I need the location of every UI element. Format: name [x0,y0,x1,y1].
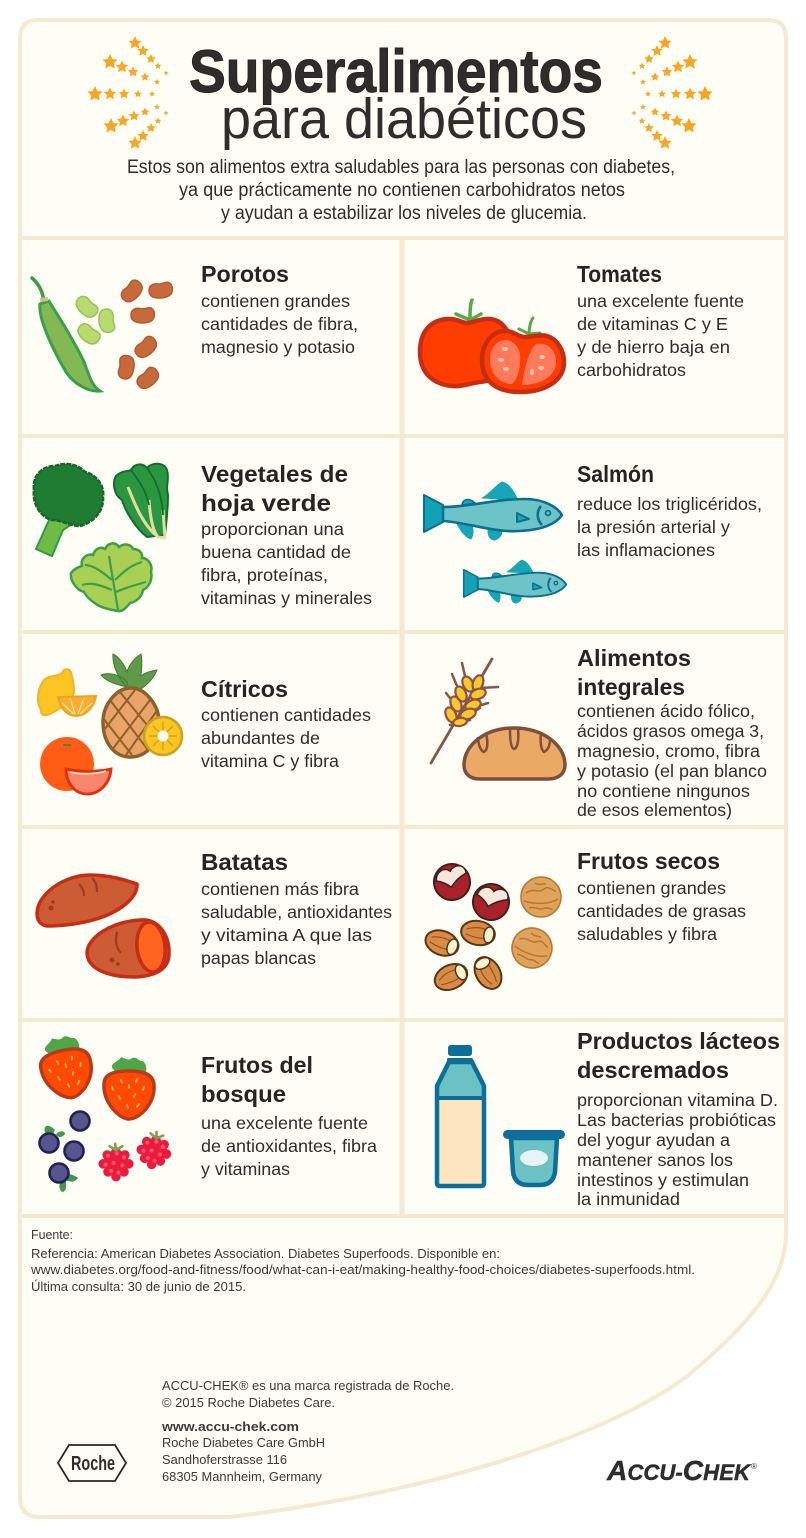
panel: Alimentos integrales [431,645,767,820]
description: la presión arterial y [577,517,730,537]
stars left [87,36,168,149]
description: de vitaminas C y E [577,314,728,334]
description: magnesio, cromo, fibra [577,741,760,761]
logo: Accu-Chek: ® [751,1462,757,1471]
panel: Productos lácteos descremados [437,1028,780,1209]
logo: Accu-Chek: ACCU-CHEK [606,1455,752,1486]
icon: nuts [422,860,561,995]
source references [30,1227,695,1294]
panel: Tomates [420,261,744,392]
description: ácidos grasos omega 3, [577,721,764,741]
legal and contact text: ACCU-CHEK® es una marca registrada de Roche. [162,1378,454,1393]
description [577,701,767,820]
icon: sweet potatoes [37,875,169,977]
heading [577,645,691,700]
description: una excelente fuente [577,291,744,311]
description: papas blancas [201,948,316,968]
title: Superalimentos [189,38,603,105]
heading [201,461,348,516]
panel: Batatas [37,849,392,977]
description: mantener sanos los [577,1150,733,1170]
description: magnesio y potasio [201,337,355,357]
heading: Frutos del [201,1052,313,1078]
description: Las bacterias probióticas [577,1110,776,1130]
description [577,878,746,944]
description: contienen cantidades [201,705,371,725]
description [577,291,744,380]
description [201,705,371,771]
icon: berries [35,1032,175,1192]
panel: Vegetales de hoja verde [34,461,372,611]
panel: Frutos secos [422,848,746,995]
logo: Roche [58,1445,126,1481]
description: fibra, proteínas, [201,565,328,585]
description: saludables y fibra [577,924,717,944]
heading: Vegetales de [201,461,348,487]
description: cantidades de grasas [577,901,746,921]
heading: Cítricos [201,676,288,702]
source references: Fuente: [31,1227,73,1242]
description: y de hierro baja en [577,337,730,357]
panel: Cítricos [38,654,371,794]
legal and contact text: © 2015 Roche Diabetes Care. [162,1395,335,1410]
description: contienen grandes [201,291,350,311]
intro text: ya que prácticamente no contienen carbohidratos netos [179,180,625,201]
heading: Tomates [577,261,662,287]
description: la inmunidad [577,1189,680,1209]
description: proporcionan vitamina D. [577,1090,778,1110]
heading: Alimentos [577,645,691,671]
description: cantidades de fibra, [201,314,358,334]
description [201,519,372,608]
icon: broccoli and greens [34,464,168,611]
description [201,291,358,357]
description: del yogur ayudan a [577,1130,730,1150]
description: buena cantidad de [201,542,351,562]
description: carbohidratos [577,360,686,380]
stars right [632,36,713,149]
description: contienen más fibra [201,879,359,899]
heading: Porotos [201,261,289,287]
source references: www.diabetes.org/food-and-fitness/food/what-can-i-eat/making-healthy-food-choices/diabetes-superfoods.html. [30,1262,695,1277]
legal and contact text: www.accu-chek.com [161,1419,299,1434]
description: y vitaminas [201,1159,290,1179]
legal and contact text: Roche Diabetes Care GmbH [162,1435,325,1450]
description: contienen grandes [577,878,726,898]
title: para diabéticos [221,87,587,151]
legal and contact text: Sandhoferstrasse 116 [162,1452,287,1467]
description: intestinos y estimulan [577,1170,749,1190]
description [577,1090,778,1209]
description [201,879,392,968]
description: de antioxidantes, fibra [201,1136,377,1156]
panel: Porotos [32,261,358,392]
source references: Referencia: American Diabetes Association. Diabetes Superfoods. Disponible en: [31,1246,500,1261]
icon: tomatoes [420,300,564,392]
icon: citrus fruits [38,654,182,794]
intro text: y ayudan a estabilizar los niveles de glucemia. [221,203,587,224]
source references: Última consulta: 30 de junio de 2015. [31,1279,246,1294]
intro text [127,157,675,224]
legal and contact text [161,1378,454,1484]
description: vitaminas y minerales [201,588,372,608]
panel: Salmón [424,461,762,603]
heading: Batatas [201,849,288,875]
description: saludable, antioxidantes [201,902,392,922]
header panel [87,36,713,224]
description: no contiene ningunos [577,781,750,801]
heading: descremados [577,1057,729,1083]
description: de esos elementos) [577,800,732,820]
heading [577,1028,780,1083]
icon: wheat and bread [431,659,565,779]
intro text: Estos son alimentos extra saludables para las personas con diabetes, [127,157,675,178]
description: vitamina C y fibra [201,751,339,771]
icon: salmon [424,482,566,603]
icon: milk bottle and yogurt [437,1045,565,1186]
description [201,1113,377,1179]
heading: Productos lácteos [577,1028,780,1054]
icon: beans [32,278,174,392]
description: proporcionan una [201,519,344,539]
description: y potasio (el pan blanco [577,761,767,781]
heading: Frutos secos [577,848,720,874]
description: contienen ácido fólico, [577,701,755,721]
description: y vitamina A que las [201,925,372,945]
title [189,38,603,151]
heading: integrales [577,674,685,700]
description: una excelente fuente [201,1113,368,1133]
description [577,494,762,560]
legal and contact text: 68305 Mannheim, Germany [162,1469,322,1484]
description: abundantes de [201,728,320,748]
heading: hoja verde [201,490,331,516]
description: reduce los triglicéridos, [577,494,762,514]
heading [201,1052,313,1107]
panel: Frutos del bosque [35,1032,377,1192]
description: las inflamaciones [577,540,715,560]
logo: Roche: Roche [71,1453,115,1475]
heading: bosque [201,1081,286,1107]
heading: Salmón [577,461,654,487]
